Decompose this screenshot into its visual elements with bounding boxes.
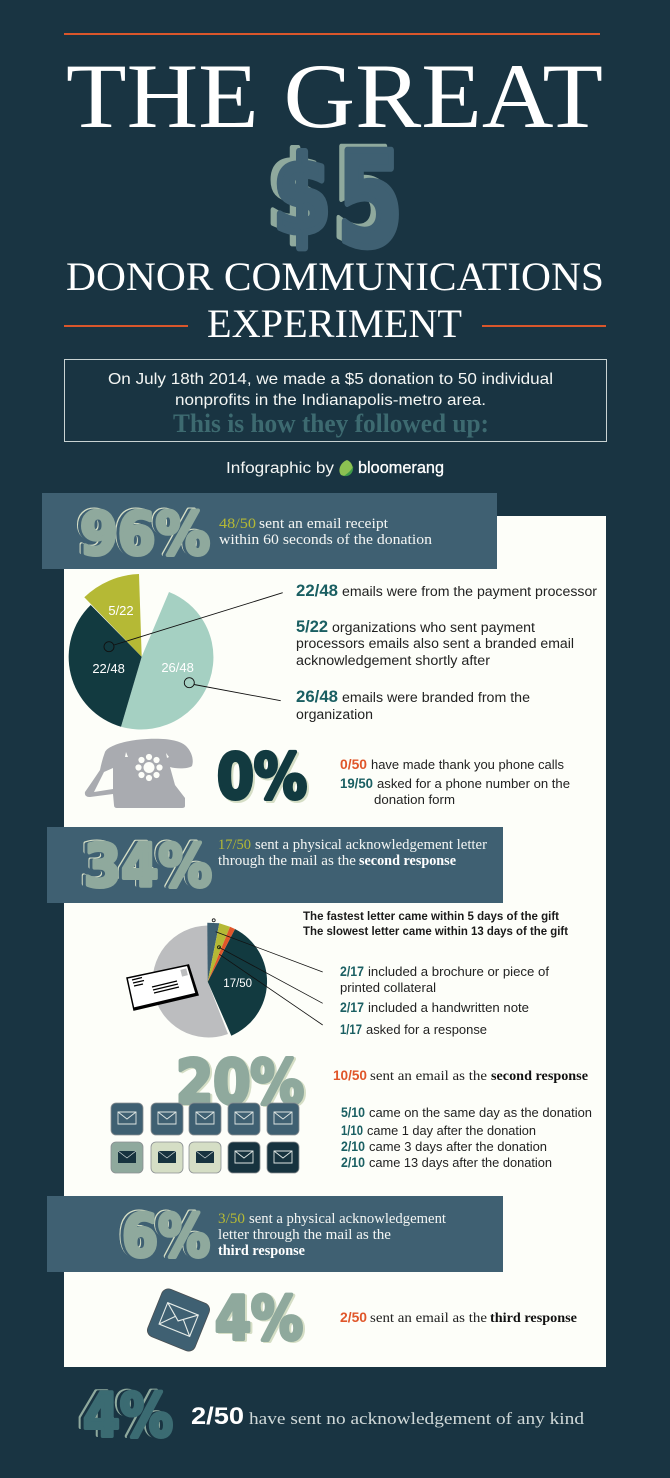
banner: 6 percent: 3/50: [218, 1211, 245, 1227]
text: phone calls: asked for a phone number on the: [377, 776, 570, 791]
pie chart: email sources: [69, 574, 283, 729]
text: letter contents: [340, 963, 549, 1037]
slice: payment processor 22/48: [69, 605, 142, 727]
icon: rotary dial: [135, 754, 163, 781]
text: email breakdown: processors emails also sent a branded email: [296, 636, 574, 651]
title: $5: $: [273, 134, 331, 257]
banner: 34 percent: sent a physical acknowledgement letter: [255, 837, 487, 853]
text: fastest and slowest letter: The slowest letter came within 13 days of the gift: [303, 926, 568, 938]
text: fastest and slowest letter: [303, 911, 568, 938]
text: second email response: [333, 1067, 592, 1170]
pie chart: email sources: 26/48: [161, 660, 194, 675]
text: email breakdown: organizations who sent payment: [332, 620, 535, 635]
text: letter contents: printed collateral: [340, 980, 436, 995]
leader line: payment processor: [104, 593, 283, 652]
pie chart: email sources: 22/48: [92, 661, 125, 676]
slice: handwritten note: [208, 923, 230, 982]
credit: infographic by bloomerang: Infographic by: [226, 460, 334, 477]
text: second email response: came on the same day as the donation: [369, 1105, 592, 1120]
text: third email response: 2/50: [340, 1309, 367, 1325]
pie chart: email sources: 5/22: [108, 603, 134, 618]
title: $5: 5: [331, 120, 397, 272]
slice: brochure: [207, 923, 219, 982]
text: letter contents: 2/17: [340, 963, 364, 979]
text: phone calls: 0/50: [340, 756, 367, 772]
text: second email response: 10/50: [333, 1067, 367, 1083]
big number: 4% bottom: 4%: [78, 1380, 168, 1450]
banner: 96 percent: [42, 493, 497, 569]
banner: 6 percent: third response: [218, 1243, 306, 1259]
slice: letter 17/50: [208, 929, 267, 1036]
text: email breakdown: 26/48: [296, 688, 338, 706]
text: third email response: third response: [490, 1311, 577, 1326]
pie chart: physical letters: [127, 919, 323, 1037]
intro box: [64, 360, 606, 442]
big number: 96%: 96%: [76, 498, 206, 567]
text: letter contents: 2/17: [340, 999, 364, 1015]
text: second email response: came 13 days after the donation: [369, 1155, 552, 1170]
text: second email response: came 1 day after the donation: [367, 1123, 536, 1138]
big number: 6%: 6%: [119, 1201, 207, 1270]
text: no acknowledgement: 2/50: [191, 1403, 244, 1430]
intro box: This is how they followed up:: [173, 409, 489, 438]
big number: 20%: 20%: [176, 1047, 304, 1118]
text: second email response: second response: [491, 1069, 588, 1084]
text: email breakdown: 22/48: [296, 582, 338, 600]
intro box: On July 18th 2014, we made a $5 donation to 50 individual: [108, 371, 553, 388]
slice: no letter: [153, 926, 228, 1037]
big number: 34%: 34%: [84, 831, 212, 900]
big number: 34%: 34%: [80, 830, 208, 899]
big number: 4% in panel: 4%: [217, 1285, 305, 1355]
text: letter contents: included a brochure or piece of: [368, 964, 549, 979]
pie chart: physical letters: 17/50: [223, 978, 252, 990]
big number: 4% in panel: 4%: [215, 1284, 303, 1354]
text: email breakdown: [296, 582, 598, 722]
credit: infographic by bloomerang: bloomerang: [358, 459, 444, 477]
text: no acknowledgement: have sent no acknowledgement of any kind: [249, 1409, 585, 1428]
leader lines: [212, 919, 323, 1025]
email icon grid: [111, 1103, 299, 1173]
title: the great: THE GREAT: [66, 45, 603, 147]
text: second email response: sent an email as the: [370, 1069, 487, 1084]
banner: 6 percent: letter through the mail as the: [218, 1227, 391, 1243]
text: email breakdown: emails were from the payment processor: [342, 584, 598, 599]
text: fastest and slowest letter: The fastest letter came within 5 days of the gift: [303, 911, 559, 923]
icon: tilted email tile: [145, 1287, 212, 1353]
text: letter contents: included a handwritten note: [368, 1000, 529, 1015]
banner: 6 percent: sent a physical acknowledgement: [249, 1211, 446, 1227]
text: phone calls: donation form: [374, 792, 455, 807]
credit: infographic by bloomerang: [226, 459, 444, 477]
text: email breakdown: organization: [296, 707, 373, 722]
big number: 6%: 6%: [118, 1200, 206, 1269]
text: email breakdown: acknowledgement shortly after: [296, 653, 491, 668]
banner: 34 percent: [47, 827, 503, 903]
text: second email response: 1/10: [341, 1122, 363, 1138]
text: email breakdown: 5/22: [296, 618, 328, 636]
icon: envelope: [127, 965, 198, 1010]
title: $5: [266, 120, 403, 276]
slice: branded 26/48: [121, 592, 213, 729]
text: phone calls: 19/50: [340, 775, 373, 791]
title block: [64, 33, 606, 346]
text: third email response: sent an email as the: [370, 1311, 487, 1326]
slice: asked for response: [208, 927, 235, 982]
banner: 34 percent: 17/50: [218, 837, 251, 853]
big number: 4% bottom: 4%: [80, 1381, 170, 1451]
main white panel: [64, 516, 606, 1367]
title: $5: $: [266, 130, 324, 253]
text: third email response: [340, 1309, 577, 1326]
title: donor communications: DONOR COMMUNICATIONS: [66, 254, 604, 299]
title: $5: 5: [337, 124, 403, 276]
text: letter contents: 1/17: [340, 1021, 362, 1037]
banner: 34 percent: second response: [359, 853, 457, 869]
banner: 6 percent: [47, 1196, 503, 1272]
big number: 6%: 6%: [122, 1201, 210, 1270]
big number: 96%: 96%: [80, 499, 210, 568]
banner: 96 percent: sent an email receipt: [259, 516, 388, 532]
text: phone calls: [340, 756, 570, 807]
icon: telephone: [85, 739, 193, 808]
banner: 96 percent: 48/50: [219, 516, 256, 532]
banner: 34 percent: through the mail as the: [218, 853, 356, 869]
leader line: branded: [184, 678, 281, 701]
text: second email response: 2/10: [341, 1138, 365, 1154]
big number: 4% bottom: 4%: [83, 1381, 173, 1451]
text: phone calls: have made thank you phone calls: [371, 757, 564, 772]
big number: 0%: 0%: [219, 742, 309, 815]
big number: 34%: 34%: [81, 831, 209, 900]
big number: 0%: 0%: [217, 740, 307, 813]
icon: bloomerang leaf: [339, 460, 353, 476]
text: letter contents: asked for a response: [366, 1022, 487, 1037]
slice: 5/22: [84, 574, 142, 657]
intro box: nonprofits in the Indianapolis-metro area.: [175, 392, 486, 409]
big number: 20%: 20%: [178, 1048, 306, 1119]
text: no acknowledgement: [191, 1403, 585, 1430]
big number: 96%: 96%: [77, 499, 207, 568]
title: experiment: EXPERIMENT: [207, 301, 462, 346]
text: email breakdown: emails were branded from the: [342, 690, 530, 705]
text: second email response: 5/10: [341, 1104, 365, 1120]
text: second email response: came 3 days after the donation: [369, 1139, 547, 1154]
text: second email response: 2/10: [341, 1154, 365, 1170]
banner: 96 percent: within 60 seconds of the donation: [219, 532, 433, 548]
